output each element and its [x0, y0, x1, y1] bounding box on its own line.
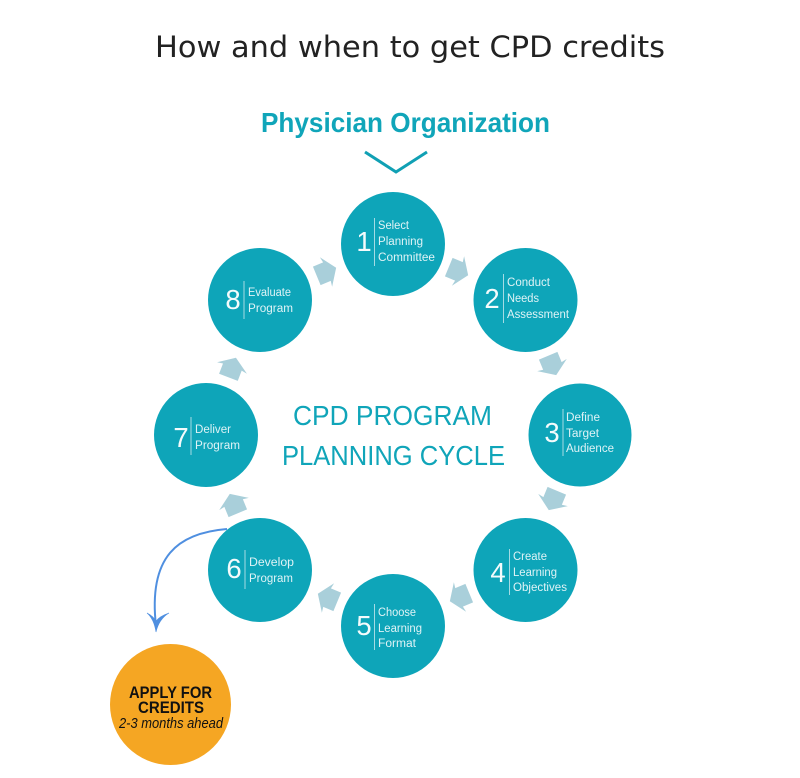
step 6: develop program: Program — [249, 573, 293, 585]
step 4: create learning objectives: Create — [513, 551, 547, 563]
step 3: define target audience: 3 — [544, 417, 560, 448]
step 7: deliver program: Deliver — [195, 424, 231, 436]
title: How and when to get CPD credits — [155, 30, 665, 64]
arrow: step 8 to 1 — [311, 253, 342, 291]
arrow: step 1 to 2 — [443, 252, 474, 290]
step 1: select planning committee — [341, 192, 445, 296]
step 1: select planning committee: Committee — [378, 252, 435, 264]
step 7: deliver program: 7 — [173, 422, 189, 453]
step 2: conduct needs assessment: Assessment — [507, 309, 570, 321]
step 2: conduct needs assessment: Needs — [507, 293, 539, 305]
step 5: choose learning format — [341, 574, 445, 678]
icon: chevron pointing down — [365, 152, 427, 172]
step 7: deliver program — [154, 383, 258, 487]
callout: apply for credits: 2-3 months ahead — [118, 715, 224, 732]
step 8: evaluate program: 8 — [225, 284, 241, 315]
callout: apply for credits: CREDITS — [138, 698, 204, 717]
step 2: conduct needs assessment — [474, 248, 578, 352]
step 8: evaluate program: Evaluate — [248, 287, 291, 299]
step 3: define target audience: Define — [566, 412, 600, 424]
callout: apply for credits: APPLY FOR — [129, 683, 212, 702]
arrow: step 7 to 8 — [213, 352, 251, 383]
step 4: create learning objectives: 4 — [490, 557, 506, 588]
step 3: define target audience: Audience — [566, 443, 614, 455]
step 5: choose learning format: Choose — [378, 607, 416, 619]
step 4: create learning objectives: Objectives — [513, 582, 567, 594]
arrow: step 6 to 7 — [215, 488, 253, 519]
step 2: conduct needs assessment: 2 — [484, 283, 500, 314]
step 2: conduct needs assessment: Conduct — [507, 277, 551, 289]
arrow: step 2 to 3 — [533, 350, 571, 381]
center heading: CPD program planning cycle: PLANNING CYCLE — [282, 440, 505, 471]
step 3: define target audience: Target — [566, 428, 600, 440]
arrow: step 4 to 5 — [444, 578, 475, 616]
center heading: CPD program planning cycle — [282, 400, 505, 471]
step 1: select planning committee: Select — [378, 220, 410, 232]
center heading: CPD program planning cycle: CPD PROGRAM — [293, 400, 492, 431]
step 6: develop program: Develop — [249, 557, 294, 569]
step 6: develop program: 6 — [226, 553, 242, 584]
arrow: step 5 to 6 — [312, 579, 343, 617]
step 4: create learning objectives — [474, 518, 578, 622]
step 7: deliver program: Program — [195, 440, 240, 452]
heading: physician organization: Physician Organization — [261, 107, 550, 138]
step 8: evaluate program: Program — [248, 303, 293, 315]
step 8: evaluate program — [208, 248, 312, 352]
step 5: choose learning format: Learning — [378, 623, 422, 635]
step 6: develop program — [208, 518, 312, 622]
step 1: select planning committee: Planning — [378, 236, 423, 248]
step 5: choose learning format: 5 — [356, 610, 372, 641]
arrow: step 3 to 4 — [534, 485, 572, 516]
step 3: define target audience — [528, 384, 632, 486]
callout: apply for credits — [110, 644, 231, 765]
step 1: select planning committee: 1 — [356, 226, 372, 257]
step 4: create learning objectives: Learning — [513, 567, 557, 579]
arrow: curved blue arrow to apply for credits — [147, 529, 227, 632]
step 5: choose learning format: Format — [378, 638, 417, 650]
